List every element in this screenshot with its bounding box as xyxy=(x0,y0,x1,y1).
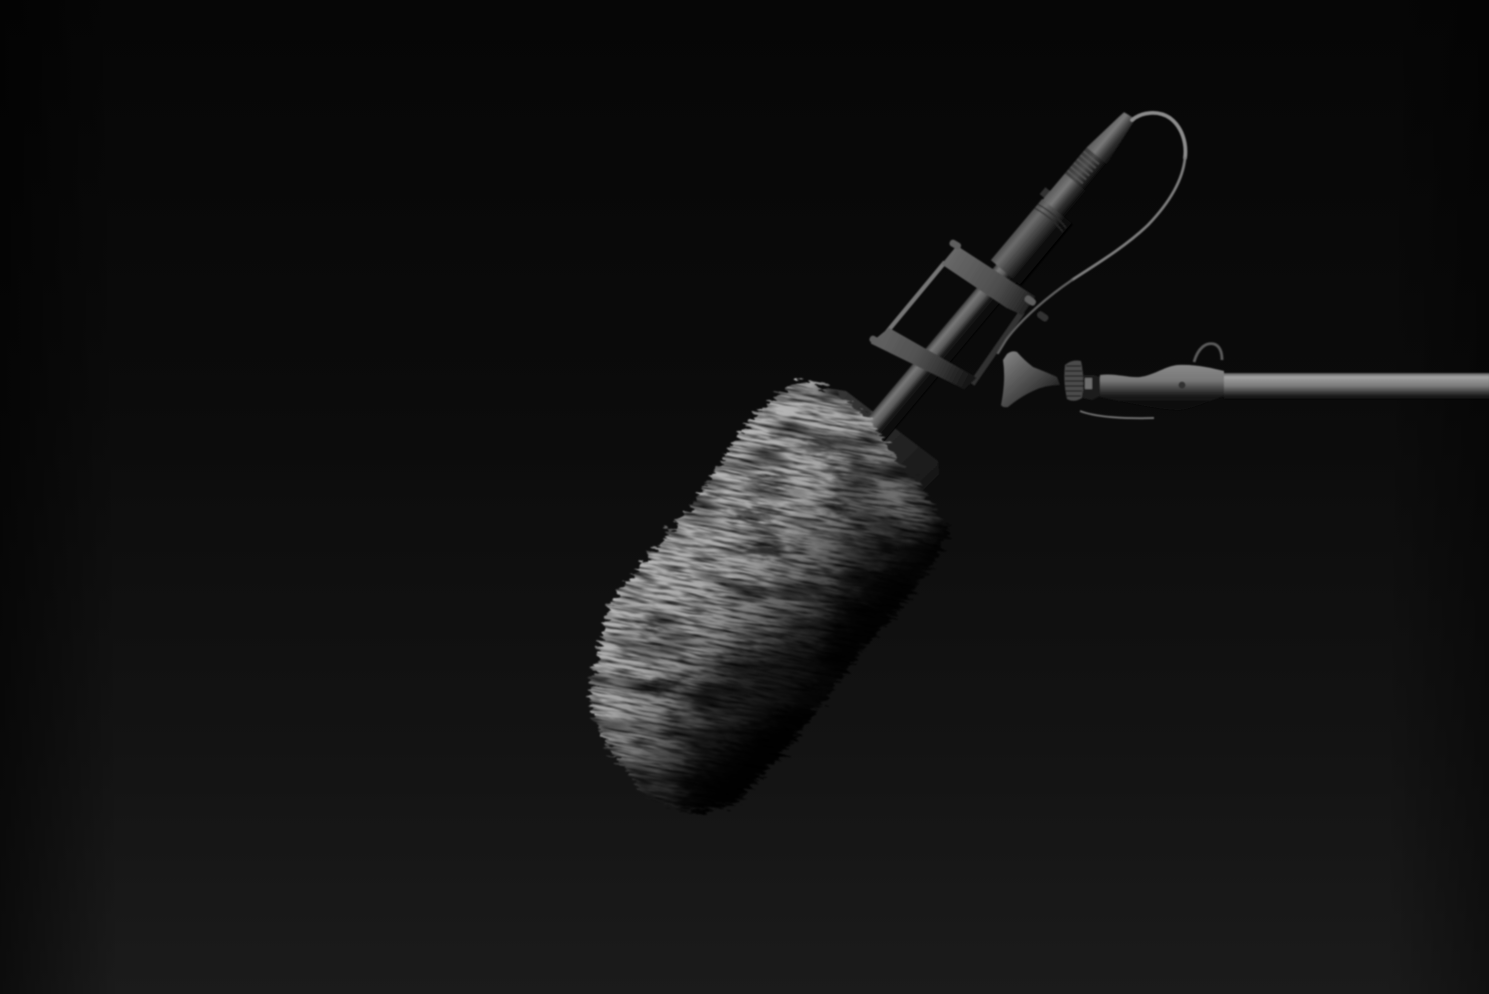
body rings xyxy=(1034,203,1067,232)
side nub xyxy=(1040,187,1050,198)
handle screw xyxy=(1178,382,1186,388)
top band xyxy=(943,247,1034,314)
right strut xyxy=(972,312,1022,384)
fur dark patch xyxy=(821,560,904,652)
connector tip xyxy=(1087,107,1141,164)
fur light tuft centre xyxy=(786,576,830,604)
fur shading overlays xyxy=(641,444,938,864)
wing knob xyxy=(1001,351,1060,407)
microphone assembly xyxy=(586,110,1489,815)
lower wire xyxy=(1080,411,1154,418)
narrow section xyxy=(1043,173,1086,217)
fur lower middle shadow xyxy=(675,639,798,722)
knurled ring xyxy=(1064,360,1083,401)
connector knurl xyxy=(1065,147,1106,190)
shock mount xyxy=(868,239,1050,388)
fur body xyxy=(589,380,950,815)
boom rod xyxy=(1224,373,1489,399)
fur shadow at base xyxy=(672,724,770,812)
lower tube xyxy=(858,257,1024,447)
ring collar xyxy=(1083,375,1100,400)
fur swirl dark spot xyxy=(845,452,865,504)
left strut xyxy=(887,262,945,332)
mount screws xyxy=(868,239,1050,347)
bottom band xyxy=(872,329,975,388)
pole ring xyxy=(1194,344,1222,362)
fur light tuft upper right xyxy=(872,473,938,537)
windscreen end cap xyxy=(826,388,939,492)
microphone tube and connector xyxy=(849,103,1151,451)
furry windscreen xyxy=(586,377,950,815)
boom pole and handle xyxy=(1001,344,1489,418)
mic body xyxy=(991,199,1073,286)
fur dark slashes xyxy=(641,444,852,692)
cable loop xyxy=(998,113,1185,353)
handle grip xyxy=(1100,365,1224,410)
